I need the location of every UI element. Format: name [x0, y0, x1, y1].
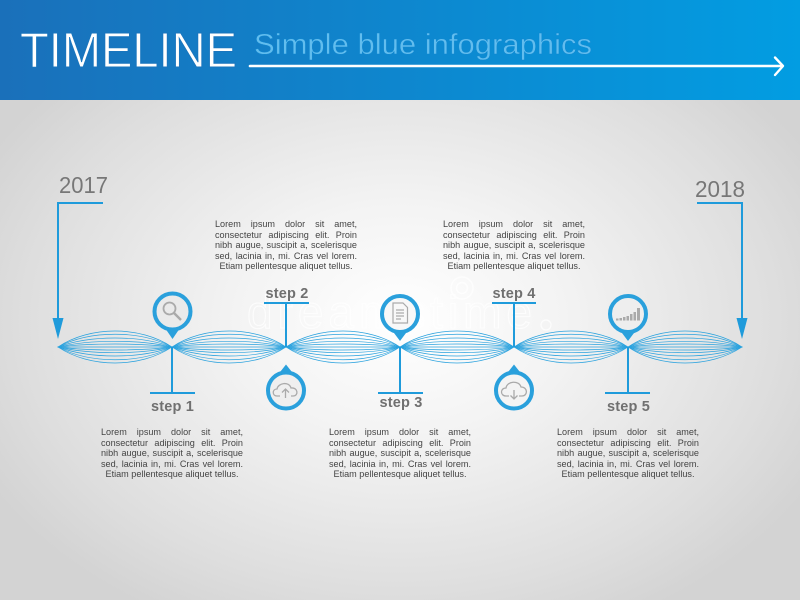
- text block: step 1: nibh augue, suscipit a, scelerisque: [101, 448, 243, 458]
- step 5 label: step 5: [607, 399, 650, 415]
- arrow: 2018 to timeline end: [697, 203, 748, 339]
- text block: step 3: nibh augue, suscipit a, scelerisque: [329, 448, 471, 458]
- step 3 marker: [378, 296, 423, 411]
- text block: step 3: Lorem ipsum dolor sit amet,: [329, 427, 471, 437]
- watermark: dreamstime: [247, 286, 532, 338]
- icon: document pin: [382, 296, 418, 341]
- icon: cloud download pin: [496, 364, 532, 408]
- text block: step 3: consectetur adipiscing elit. Proin: [329, 438, 471, 448]
- step 4 marker: [492, 286, 536, 408]
- year 2017: 2017: [59, 172, 108, 198]
- text block: step 5: consectetur adipiscing elit. Proin: [557, 438, 699, 448]
- text block: step 4: sed, lacinia in, mi. Cras vel lorem.: [443, 251, 585, 261]
- text block: step 2: [215, 219, 357, 271]
- step 5 marker: [605, 296, 650, 415]
- text block: step 1: sed, lacinia in, mi. Cras vel lorem.: [101, 459, 243, 469]
- text block: step 5: Lorem ipsum dolor sit amet,: [557, 427, 699, 437]
- text block: step 3: Etiam pellentesque aliquet tellus.: [334, 469, 466, 479]
- text block: step 4: consectetur adipiscing elit. Proin: [443, 230, 585, 240]
- step 2 label: step 2: [265, 286, 309, 302]
- header band: [0, 0, 800, 100]
- text block: step 5: sed, lacinia in, mi. Cras vel lorem.: [557, 459, 699, 469]
- text block: step 2: consectetur adipiscing elit. Proin: [215, 230, 357, 240]
- title: TIMELINE: [20, 24, 237, 78]
- step 3 label: step 3: [379, 395, 423, 411]
- text block: step 5: Etiam pellentesque aliquet tellus.: [562, 469, 694, 479]
- text block: step 4: [443, 219, 585, 271]
- step 1 label: step 1: [151, 399, 194, 415]
- icon: bar chart pin: [610, 296, 646, 341]
- step 1 marker: [150, 294, 195, 415]
- header arrow: [250, 58, 783, 75]
- text block: step 2: sed, lacinia in, mi. Cras vel lorem.: [215, 251, 357, 261]
- text block: step 5: nibh augue, suscipit a, scelerisque: [557, 448, 699, 458]
- text block: step 2: Etiam pellentesque aliquet tellus.: [220, 261, 352, 271]
- step 4 label: step 4: [492, 286, 536, 302]
- timeline ribbon: [58, 331, 742, 363]
- text block: step 4: Etiam pellentesque aliquet tellus.: [448, 261, 580, 271]
- icon: cloud upload pin: [268, 364, 304, 408]
- text block: step 4: Lorem ipsum dolor sit amet,: [443, 219, 585, 229]
- text block: step 1: Lorem ipsum dolor sit amet,: [101, 427, 243, 437]
- text block: step 1: [101, 427, 243, 479]
- text block: step 3: sed, lacinia in, mi. Cras vel lorem.: [329, 459, 471, 469]
- subtitle: Simple blue infographics: [254, 29, 592, 61]
- text block: step 2: nibh augue, suscipit a, scelerisque: [215, 240, 357, 250]
- text block: step 1: Etiam pellentesque aliquet tellus.: [106, 469, 238, 479]
- icon: magnifier pin: [154, 294, 190, 339]
- text block: step 4: nibh augue, suscipit a, scelerisque: [443, 240, 585, 250]
- text block: step 5: [557, 427, 699, 479]
- text block: step 2: Lorem ipsum dolor sit amet,: [215, 219, 357, 229]
- arrow: 2017 to timeline start: [52, 203, 103, 339]
- text block: step 1: consectetur adipiscing elit. Proin: [101, 438, 243, 448]
- text block: step 3: [329, 427, 471, 479]
- step 2 marker: [264, 286, 309, 408]
- year 2018: 2018: [695, 176, 745, 202]
